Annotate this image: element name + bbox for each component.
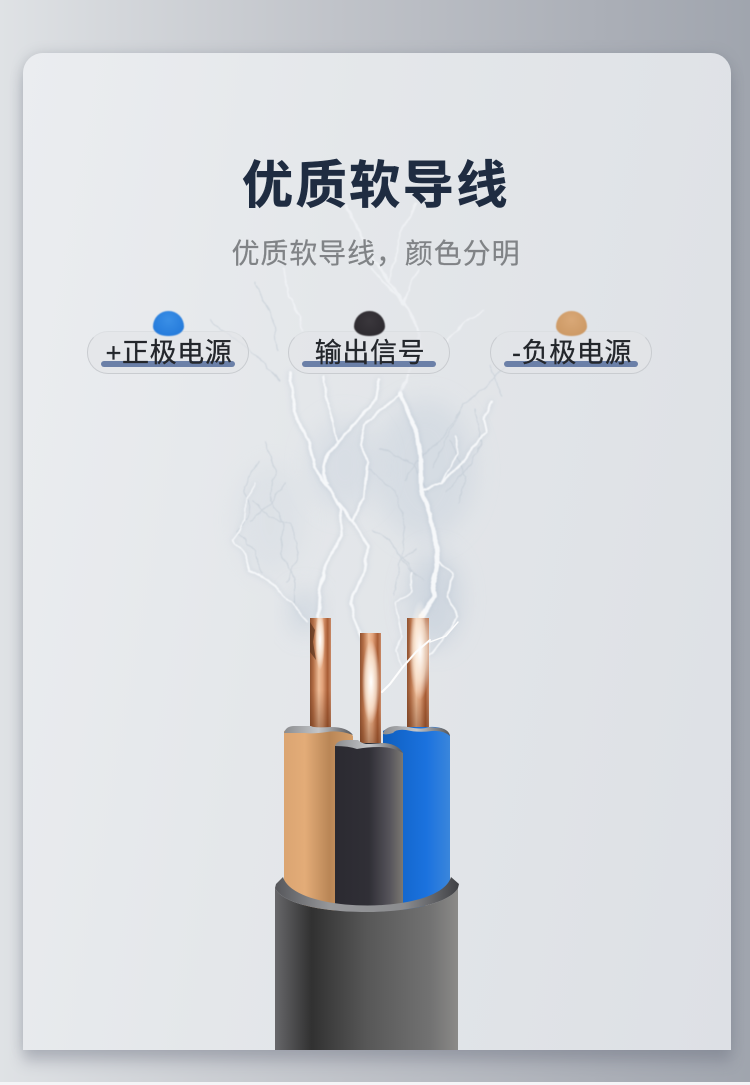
- faint veins: [210, 282, 505, 608]
- wire: black: [335, 740, 403, 916]
- legend: negative power: [490, 310, 652, 374]
- label pill: -负极电源: [512, 338, 632, 368]
- arcs over copper: [382, 622, 458, 692]
- icon: tan dome: [556, 311, 587, 336]
- legend: positive power: [87, 310, 249, 374]
- subtitle: 优质软导线，颜色分明: [231, 238, 520, 269]
- label pill: [288, 331, 450, 374]
- label pill: [490, 331, 652, 374]
- copper core: center: [360, 633, 381, 745]
- icon: black dome: [354, 311, 385, 336]
- white bolts, main: [233, 373, 492, 667]
- label pill: [87, 331, 249, 374]
- white bolts, upper: [283, 203, 483, 393]
- label pill: 输出信号: [315, 338, 425, 368]
- copper core: right: [407, 600, 431, 730]
- legend: output signal: [288, 310, 450, 374]
- copper core: left: [310, 610, 331, 730]
- title: 优质软导线: [242, 157, 510, 214]
- icon: blue dome: [153, 311, 184, 336]
- wire: blue: [383, 726, 450, 910]
- jacket: outer sheath: [275, 877, 459, 1050]
- label pill: +正极电源: [106, 338, 232, 368]
- wire: tan: [284, 726, 354, 916]
